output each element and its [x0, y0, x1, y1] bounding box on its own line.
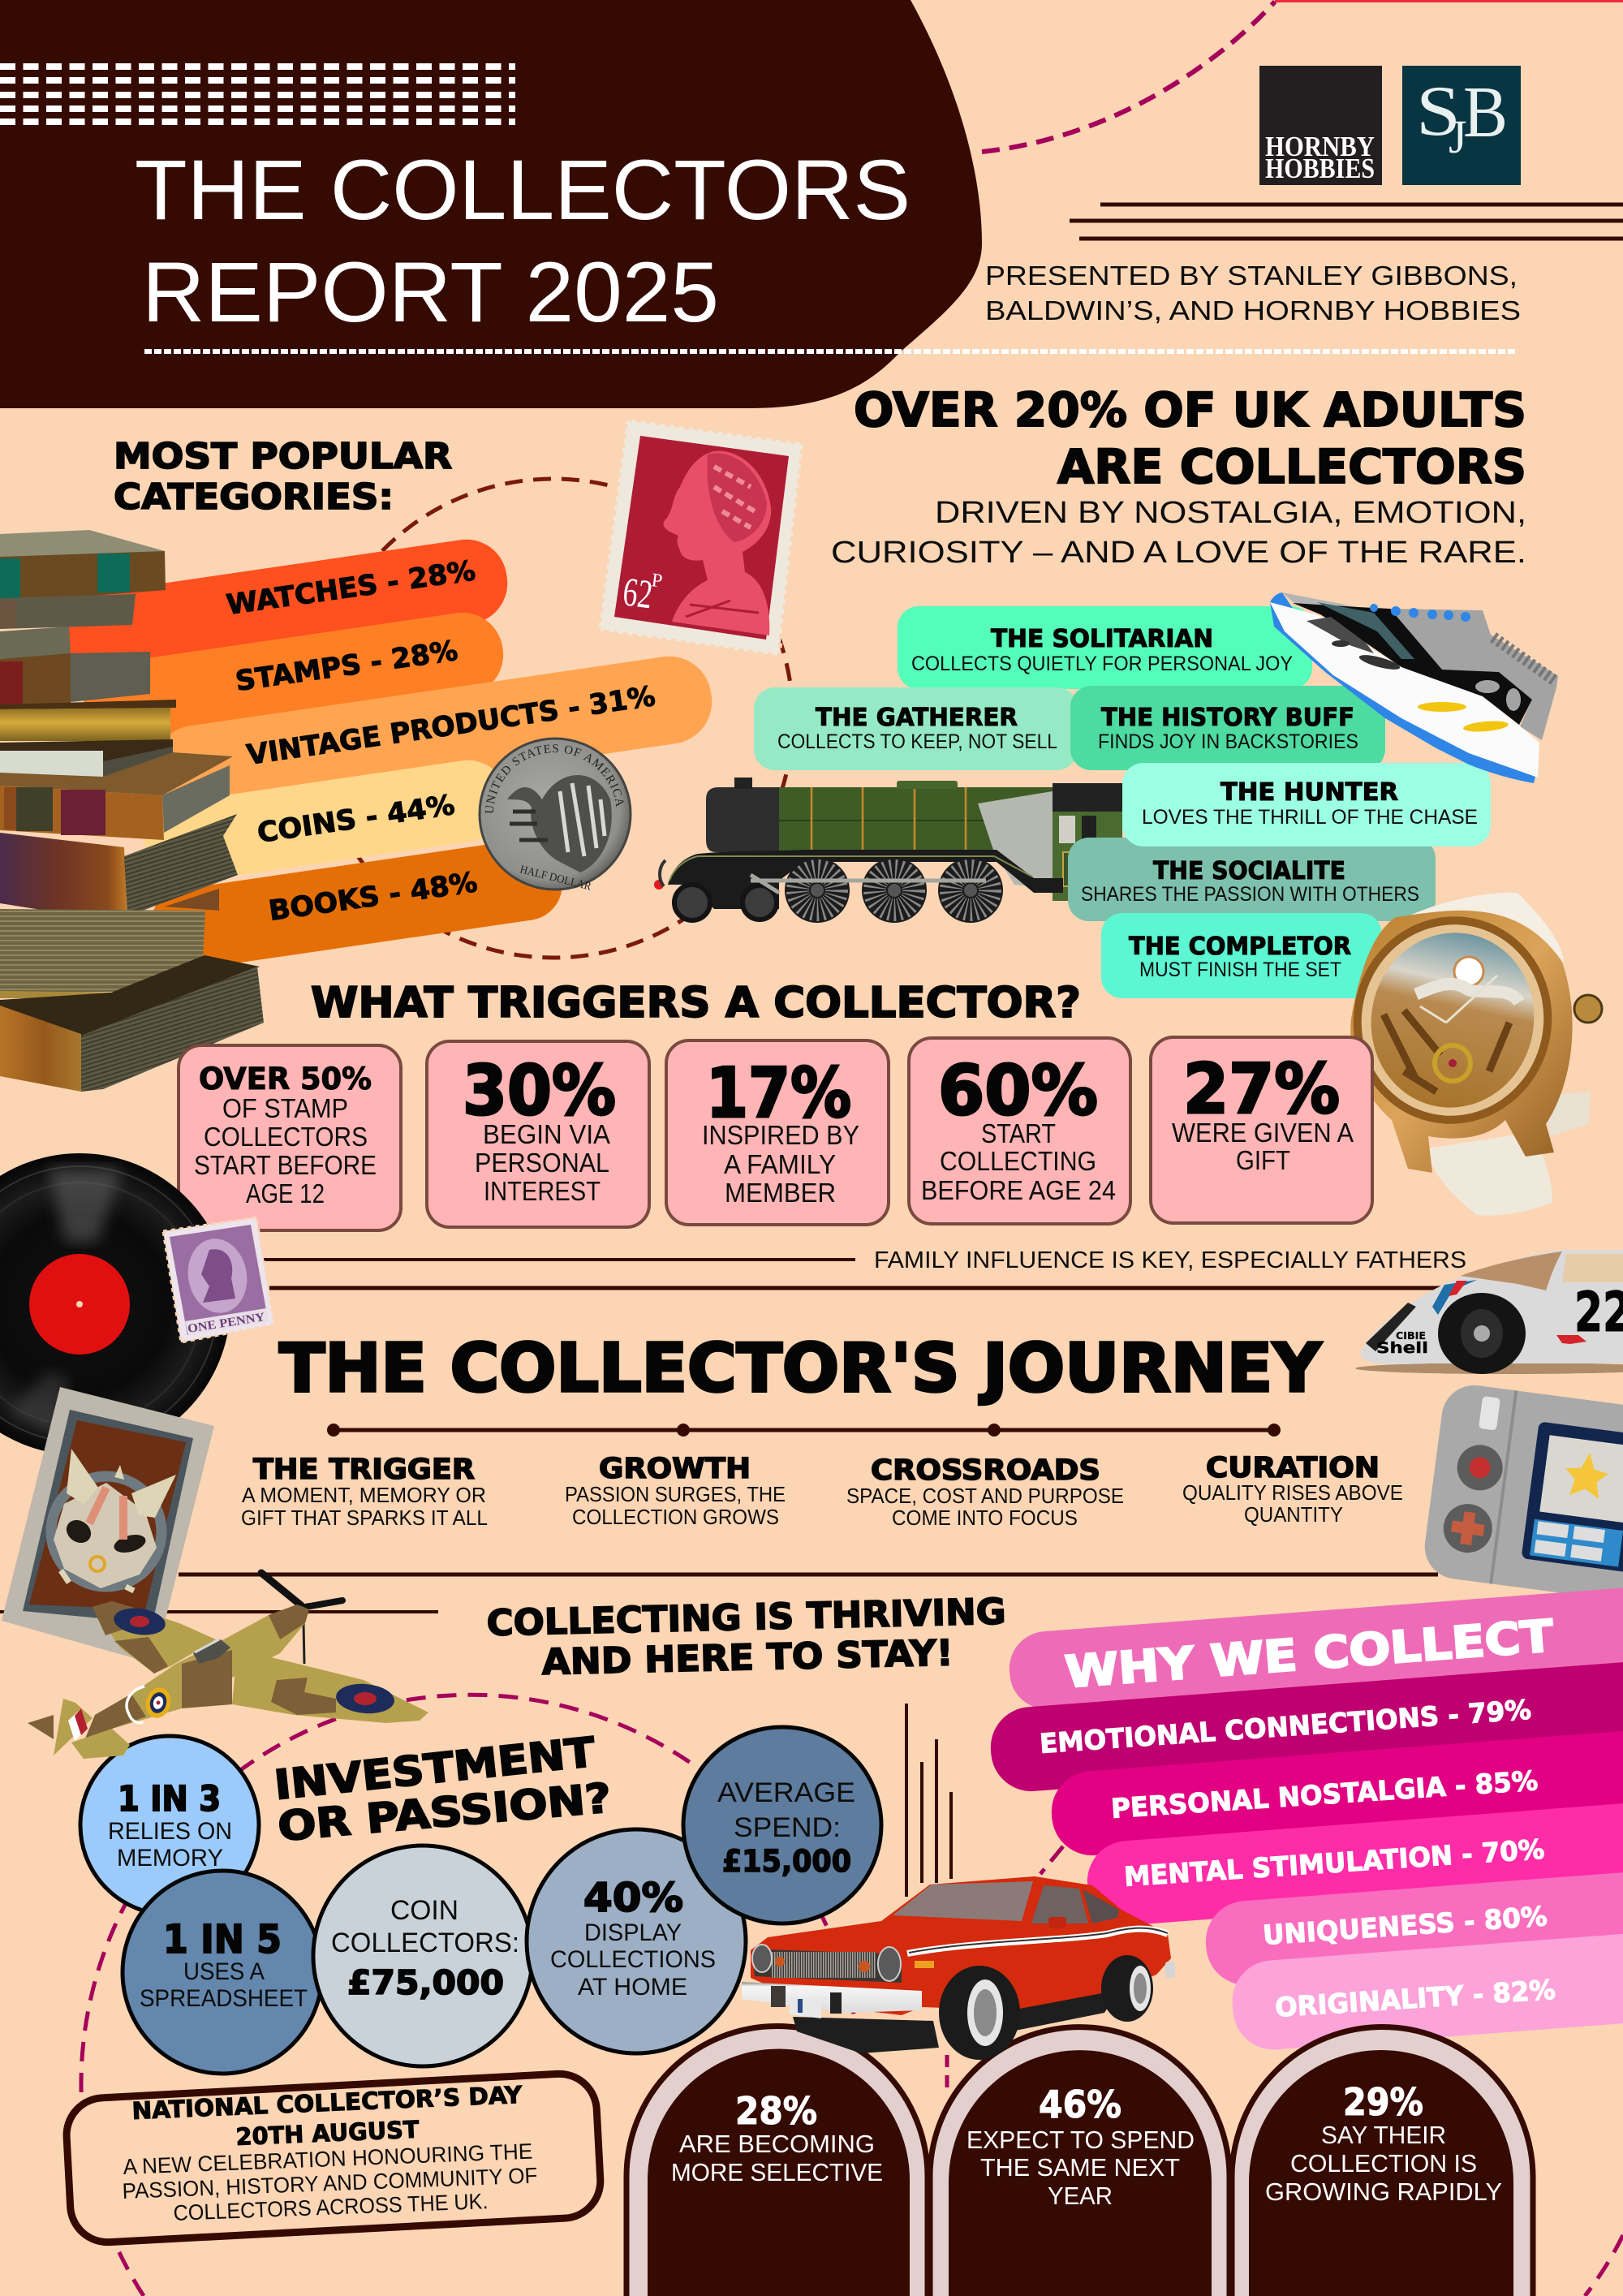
dashed segment near car: [1040, 1846, 1063, 1874]
bar: mental stimulation: [1084, 1798, 1623, 1928]
section lines: [264, 1258, 855, 1261]
dashed circle: investment: [81, 1695, 860, 2296]
journey step: crossroads: COME INTO FOCUS: [892, 1506, 1078, 1530]
headline: over 20 percent: CURIOSITY – AND A LOVE OF THE RARE.: [831, 536, 1526, 570]
heading: most popular categories: MOST POPULAR: [114, 436, 452, 477]
callout: national collector's day: 20TH AUGUST: [235, 2116, 420, 2151]
circle: 1 in 3: MEMORY: [117, 1845, 223, 1872]
arch: 28 percent: ARE BECOMING: [679, 2130, 875, 2158]
headline: over 20 percent: ARE COLLECTORS: [1057, 439, 1526, 494]
label: books: BOOKS - 48%: [267, 866, 480, 928]
card: 30 percent: BEGIN VIA: [483, 1119, 610, 1149]
journey timeline: [327, 1424, 1281, 1437]
circle: average spend: AVERAGE: [717, 1777, 855, 1808]
persona: the socialite: SHARES THE PASSION WITH OTHERS: [1081, 883, 1419, 906]
persona: the hunter: [1122, 763, 1491, 846]
circle: average spend: £15,000: [722, 1844, 851, 1879]
icon: half dollar coin: [479, 737, 631, 894]
persona: the solitarian: [898, 606, 1312, 689]
circle: 1 in 5: 1 IN 5: [163, 1917, 282, 1962]
panel: category bars: [58, 534, 717, 975]
heading: what triggers a collector: WHAT TRIGGERS A COLLECTOR?: [311, 979, 1081, 1027]
circle: coin collectors: £75,000: [347, 1963, 504, 2002]
arch: 28 percent: 28%: [735, 2089, 817, 2133]
card: 17 percent: 17%: [706, 1053, 851, 1134]
journey step: curation: QUANTITY: [1244, 1502, 1343, 1527]
decorative dotted rows: [0, 67, 515, 122]
callout: national collector's day: [65, 2072, 602, 2244]
card: 30 percent: PERSONAL: [475, 1148, 609, 1178]
circle: coin collectors: COIN: [390, 1895, 458, 1926]
journey step: curation: QUALITY RISES ABOVE: [1182, 1480, 1403, 1505]
presented by: PRESENTED BY STANLEY GIBBONS,: [985, 261, 1518, 291]
icon: half dollar coin: HALF DOLLAR: [519, 864, 593, 894]
heading: collecting is thriving: [486, 1591, 1006, 1683]
circle: 1 in 5: SPREADSHEET: [140, 1985, 308, 2012]
arch: 46 percent: YEAR: [1048, 2182, 1113, 2210]
journey step: curation: CURATION: [1206, 1452, 1380, 1484]
journey step: growth: PASSION SURGES, THE: [565, 1482, 786, 1506]
journey step: curation: [1182, 1452, 1403, 1527]
panel: arch stats: [626, 2026, 1533, 2296]
vertical lines: [906, 1704, 951, 1897]
persona: the hunter: LOVES THE THRILL OF THE CHASE: [1142, 806, 1478, 829]
card: 30 percent: [427, 1041, 649, 1227]
heading: investment or passion: INVESTMENT: [272, 1729, 597, 1809]
panel: trigger stats: [179, 1037, 1372, 1230]
bar: books: [146, 834, 567, 975]
presented by: [985, 261, 1521, 325]
card: 27 percent: WERE GIVEN A: [1172, 1118, 1354, 1148]
card: 30 percent: INTEREST: [484, 1176, 601, 1206]
persona: the socialite: THE SOCIALITE: [1153, 857, 1345, 885]
bar: uniqueness: [1203, 1867, 1623, 1988]
dotted divider: [144, 349, 1516, 354]
icon: red stamp: [598, 419, 803, 656]
callout: national collector's day: NATIONAL COLLECTOR’S DAY: [131, 2081, 523, 2125]
card: 27 percent: [1151, 1037, 1372, 1223]
label: emotional connections: EMOTIONAL CONNECTIONS - 79%: [1039, 1694, 1532, 1760]
card: 17 percent: MEMBER: [725, 1178, 836, 1208]
icon: spitfire plane: [28, 1573, 428, 1759]
arch: 29 percent: COLLECTION IS: [1290, 2149, 1477, 2178]
callout: national collector's day: COLLECTORS ACROSS THE UK.: [173, 2189, 489, 2225]
logo: SBJ monogram: S: [1416, 72, 1461, 151]
persona: the hunter: THE HUNTER: [1220, 778, 1398, 807]
journey step: crossroads: CROSSROADS: [871, 1454, 1100, 1487]
arch: 29 percent: GROWING RAPIDLY: [1265, 2178, 1502, 2206]
heading: why we collect: WHY WE COLLECT: [1063, 1610, 1555, 1698]
circle: 1 in 3: [80, 1736, 259, 1915]
card: over 50 percent: OVER 50%: [199, 1062, 372, 1096]
headline: over 20 percent: OVER 20% OF UK ADULTS: [854, 382, 1526, 437]
bar: watches: [58, 534, 513, 683]
circle: 40 percent: 40%: [583, 1875, 683, 1921]
card: over 50 percent: [179, 1045, 401, 1230]
dashed circle: categories: [314, 479, 793, 958]
top red line: [1275, 0, 1623, 2]
label: vintage products: VINTAGE PRODUCTS - 31%: [245, 680, 657, 772]
heading: most popular categories: CATEGORIES:: [114, 476, 394, 518]
bar: why we collect heading: [1007, 1579, 1623, 1712]
arch: 29 percent: SAY THEIR: [1321, 2121, 1446, 2149]
label: originality: ORIGINALITY - 82%: [1274, 1974, 1556, 2023]
journey step: the trigger: GIFT THAT SPARKS IT ALL: [241, 1506, 488, 1530]
card: over 50 percent: START BEFORE: [194, 1150, 377, 1180]
short section line: [0, 1610, 438, 1613]
heading: collecting is thriving: AND HERE TO STAY!: [541, 1633, 954, 1683]
icon: race car: Shell: [1376, 1339, 1428, 1357]
label: mental stimulation: MENTAL STIMULATION - 70%: [1123, 1833, 1545, 1893]
circle: 1 in 5: USES A: [183, 1958, 265, 1985]
card: 17 percent: A FAMILY: [724, 1149, 836, 1179]
circle: average spend: SPEND:: [734, 1812, 841, 1843]
icon: race car: CIBIE: [1396, 1330, 1426, 1342]
section line lower: [269, 1286, 1440, 1290]
card: 60 percent: 60%: [938, 1051, 1098, 1131]
persona: the solitarian: THE SOLITARIAN: [991, 625, 1213, 653]
bar: coins: [140, 755, 513, 888]
dashed circle: why we collect: [984, 1781, 1623, 2296]
journey step: growth: [565, 1453, 786, 1529]
label: coins: COINS - 44%: [256, 789, 457, 850]
journey step: crossroads: SPACE, COST AND PURPOSE: [846, 1484, 1124, 1508]
icon: trainer shoe: [1270, 592, 1558, 783]
arch: 46 percent: THE SAME NEXT: [980, 2153, 1180, 2182]
magenta dashed curve: header to top: [982, 2, 1275, 152]
card: 17 percent: INSPIRED BY: [702, 1120, 859, 1150]
headline: over 20 percent: DRIVEN BY NOSTALGIA, EMOTION,: [935, 496, 1526, 530]
card: 60 percent: [909, 1038, 1130, 1224]
icon: stack of antique books: [0, 530, 264, 1092]
logo: Hornby Hobbies: HOBBIES: [1265, 153, 1375, 184]
icon: gold skeleton watch: [1334, 893, 1602, 1216]
persona: the socialite: [1068, 838, 1436, 921]
header panel: [0, 0, 982, 408]
circle: coin collectors: COLLECTORS:: [331, 1928, 519, 1958]
logo: Hornby Hobbies: [1259, 66, 1382, 185]
heading: most popular categories: [114, 436, 452, 518]
persona: the completor: [1101, 913, 1382, 998]
card: 60 percent: COLLECTING: [940, 1146, 1096, 1176]
text: family influence: FAMILY INFLUENCE IS KEY, ESPECIALLY FATHERS: [874, 1247, 1466, 1273]
circle: 1 in 3: RELIES ON: [108, 1818, 232, 1845]
persona: the gatherer: COLLECTS TO KEEP, NOT SELL: [777, 730, 1057, 753]
circle: 40 percent: [527, 1829, 746, 2053]
title: REPORT 2025: [142, 245, 719, 340]
persona: the history buff: [1070, 686, 1385, 770]
icon: vinyl record: [0, 1153, 230, 1455]
panel: collector personas: [754, 606, 1491, 998]
bar: emotional connections: [988, 1655, 1623, 1794]
circle: 1 in 5: [123, 1871, 322, 2074]
persona: the history buff: FINDS JOY IN BACKSTORIES: [1098, 730, 1358, 753]
icon: red stamp: P: [650, 570, 664, 592]
card: 30 percent: 30%: [463, 1051, 616, 1131]
journey step: growth: COLLECTION GROWS: [572, 1505, 779, 1529]
icon: green steam train: [654, 778, 1122, 923]
icon: red stamp: 62: [621, 568, 655, 617]
icon: purple penny stamp: [163, 1217, 274, 1342]
callout: national collector's day: A NEW CELEBRATION HONOURING THE: [123, 2139, 533, 2179]
persona: the gatherer: THE GATHERER: [816, 704, 1018, 732]
icon: race car: [1355, 1250, 1623, 1374]
icon: handheld console: [1421, 1381, 1623, 1617]
label: watches: WATCHES - 28%: [225, 554, 477, 622]
heading: investment or passion: [272, 1729, 613, 1850]
card: over 50 percent: OF STAMP: [222, 1093, 348, 1123]
icon: purple penny stamp: ONE PENNY: [187, 1311, 266, 1336]
persona: the history buff: THE HISTORY BUFF: [1101, 704, 1354, 732]
logo: Hornby Hobbies: HORNBY: [1265, 131, 1375, 162]
headline: over 20 percent: [831, 382, 1526, 570]
circle: 40 percent: AT HOME: [578, 1974, 687, 2001]
circle: 40 percent: DISPLAY: [584, 1919, 682, 1946]
circle: coin collectors: [313, 1846, 532, 2066]
label: uniqueness: UNIQUENESS - 80%: [1262, 1900, 1548, 1951]
heading: collecting is thriving: COLLECTING IS THRIVING: [486, 1591, 1006, 1644]
lower section line: [179, 1573, 1438, 1576]
arch: 46 percent: 46%: [1039, 2083, 1121, 2126]
card: 60 percent: START: [981, 1118, 1056, 1148]
bar: personal nostalgia: [1048, 1725, 1623, 1859]
dashed segment over arch: [945, 2055, 949, 2090]
panel: why we collect bars: [988, 1579, 1623, 2053]
arch: 46 percent: EXPECT TO SPEND: [966, 2126, 1195, 2154]
circle: 1 in 3: 1 IN 3: [118, 1779, 221, 1820]
persona: the gatherer: [754, 687, 1078, 770]
journey step: the trigger: A MOMENT, MEMORY OR: [242, 1483, 486, 1507]
card: 27 percent: GIFT: [1236, 1145, 1290, 1175]
arch: 28 percent: MORE SELECTIVE: [671, 2158, 883, 2186]
logo: SBJ monogram: J: [1449, 110, 1467, 163]
circle: 40 percent: COLLECTIONS: [550, 1946, 716, 1973]
card: over 50 percent: COLLECTORS: [204, 1122, 368, 1152]
circle: average spend: [683, 1727, 881, 1923]
arch: 28 percent: [626, 2026, 928, 2296]
icon: half dollar coin: UNITED STATES OF AMERICA: [485, 744, 623, 813]
card: 60 percent: BEFORE AGE 24: [921, 1175, 1116, 1205]
presented by: BALDWIN’S, AND HORNBY HOBBIES: [985, 295, 1521, 325]
arch: 29 percent: [1232, 2027, 1533, 2296]
persona: the completor: MUST FINISH THE SET: [1139, 958, 1341, 981]
card: 27 percent: 27%: [1183, 1049, 1340, 1130]
journey step: the trigger: THE TRIGGER: [253, 1454, 475, 1486]
label: personal nostalgia: PERSONAL NOSTALGIA - 85%: [1110, 1764, 1539, 1824]
arch: 29 percent: 29%: [1343, 2080, 1423, 2124]
callout: national collector's day: PASSION, HISTORY AND COMMUNITY OF: [122, 2163, 538, 2203]
icon: collectible card: [2, 1387, 214, 1664]
title: THE COLLECTORS: [135, 143, 911, 238]
journey step: the trigger: [241, 1454, 488, 1530]
header lines: [1070, 205, 1623, 239]
bar: stamps: [79, 607, 509, 750]
arch: 46 percent: [930, 2027, 1229, 2296]
logo: SBJ monogram: [1402, 66, 1521, 185]
heading: the collector's journey: THE COLLECTOR'S JOURNEY: [279, 1330, 1323, 1407]
heading: investment or passion: OR PASSION?: [276, 1774, 613, 1850]
bar: originality: [1229, 1927, 1623, 2053]
card: over 50 percent: AGE 12: [246, 1178, 325, 1208]
bar: vintage products: [148, 651, 717, 819]
title: [135, 143, 911, 340]
persona: the solitarian: COLLECTS QUIETLY FOR PERSONAL JOY: [911, 653, 1293, 675]
label: stamps: STAMPS - 28%: [234, 635, 460, 698]
panel: investment stat circles: [80, 1727, 881, 2074]
journey step: crossroads: [846, 1454, 1124, 1530]
journey step: growth: GROWTH: [599, 1453, 751, 1485]
logo: SBJ monogram: B: [1463, 72, 1508, 153]
persona: the completor: THE COMPLETOR: [1129, 933, 1351, 961]
card: 17 percent: [666, 1040, 889, 1225]
icon: red classic car: [742, 1876, 1175, 2060]
